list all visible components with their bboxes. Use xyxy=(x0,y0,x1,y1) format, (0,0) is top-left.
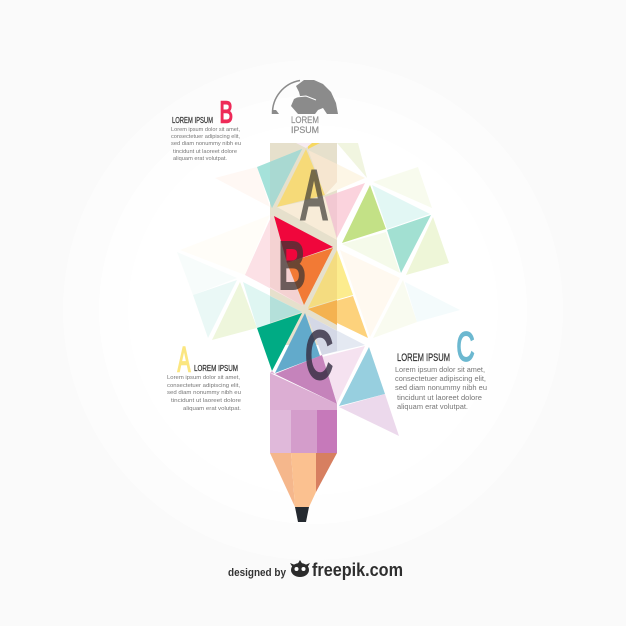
text block A: sed diam nonummy nibh eu xyxy=(167,390,241,396)
graphic: origami triangles xyxy=(177,143,460,436)
text block B: Lorem ipsum dolor sit amet, xyxy=(171,127,240,133)
letter B: B xyxy=(278,228,306,304)
icon: globe xyxy=(272,80,338,114)
globe label: LOREM xyxy=(291,115,319,125)
text block A xyxy=(167,340,241,412)
text block C: tincidunt ut laoreet dolore xyxy=(397,393,482,402)
text block B: B xyxy=(220,94,233,130)
pencil xyxy=(270,355,337,522)
text block C: Lorem ipsum dolor sit amet, xyxy=(395,365,485,374)
text block A: A xyxy=(178,340,191,380)
footer credit: freepik.com xyxy=(312,560,403,580)
text block B: consectetuer adipiscing elit, xyxy=(171,134,240,140)
text block B: aliquam erat volutpat. xyxy=(173,156,227,162)
globe label: IPSUM xyxy=(291,125,319,135)
text block A: tincidunt ut laoreet dolore xyxy=(171,398,241,404)
footer credit xyxy=(228,560,403,580)
text block A: aliquam erat volutpat. xyxy=(183,406,241,412)
text block A: Lorem ipsum dolor sit amet, xyxy=(167,375,240,381)
text block A: consectetuer adipiscing elit, xyxy=(167,383,240,389)
icon: freepik logo xyxy=(290,560,310,577)
text block A: LOREM IPSUM xyxy=(194,363,238,373)
text block C: aliquam erat volutpat. xyxy=(397,402,468,411)
text block B: tincidunt ut laoreet dolore xyxy=(173,149,237,155)
globe label xyxy=(291,115,319,135)
text block B xyxy=(171,94,241,162)
text block C: sed diam nonummy nibh eu xyxy=(395,383,487,392)
text block C: consectetuer adipiscing elit, xyxy=(395,374,486,383)
pencil shaft base xyxy=(270,143,337,345)
text block C xyxy=(395,324,487,411)
text block C: LOREM IPSUM xyxy=(397,352,450,364)
text block B: sed diam nonummy nibh eu xyxy=(171,141,241,147)
letter A: A xyxy=(301,156,327,234)
text block B: LOREM IPSUM xyxy=(172,115,213,125)
letter C: C xyxy=(305,318,333,394)
footer credit: designed by xyxy=(228,567,287,579)
text block C: C xyxy=(456,324,474,370)
